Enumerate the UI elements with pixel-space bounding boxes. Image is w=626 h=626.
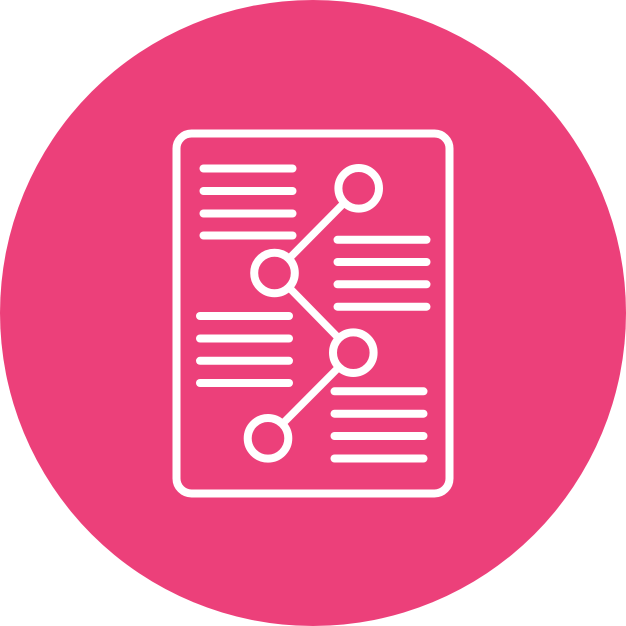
text block: top right xyxy=(338,240,426,307)
text block: top left xyxy=(204,168,292,236)
text block: lower right xyxy=(334,391,424,458)
document outline xyxy=(176,134,450,494)
text block: lower left xyxy=(200,316,289,383)
connecting line chart xyxy=(282,202,344,424)
chart nodes xyxy=(248,168,379,459)
